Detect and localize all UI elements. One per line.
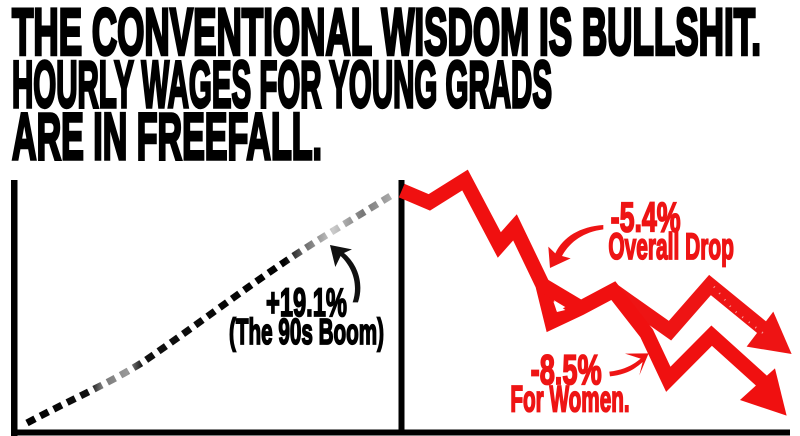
falling line: women, with arrowhead (402, 180, 787, 416)
label: The 90s Boom: (The 90s Boom) (229, 311, 384, 352)
label: For Women.: For Women. (510, 378, 630, 420)
title (12, 0, 761, 173)
title: ARE IN FREEFALL. (12, 99, 322, 173)
chart axes (11, 180, 790, 436)
panel: 90s boom rising line (27, 195, 392, 423)
label: +19.1%: +19.1% (266, 281, 347, 325)
icon: red arrow to women line (609, 353, 649, 376)
label: -5.4%: -5.4% (611, 194, 681, 241)
icon: red arrow to overall line (548, 225, 603, 268)
icon: black curved arrow (330, 245, 360, 302)
panel: red falling lines (402, 180, 792, 420)
label: -8.5%: -8.5% (531, 346, 602, 393)
falling line: overall, with arrowhead (613, 285, 792, 354)
dashed rising line (27, 195, 392, 423)
